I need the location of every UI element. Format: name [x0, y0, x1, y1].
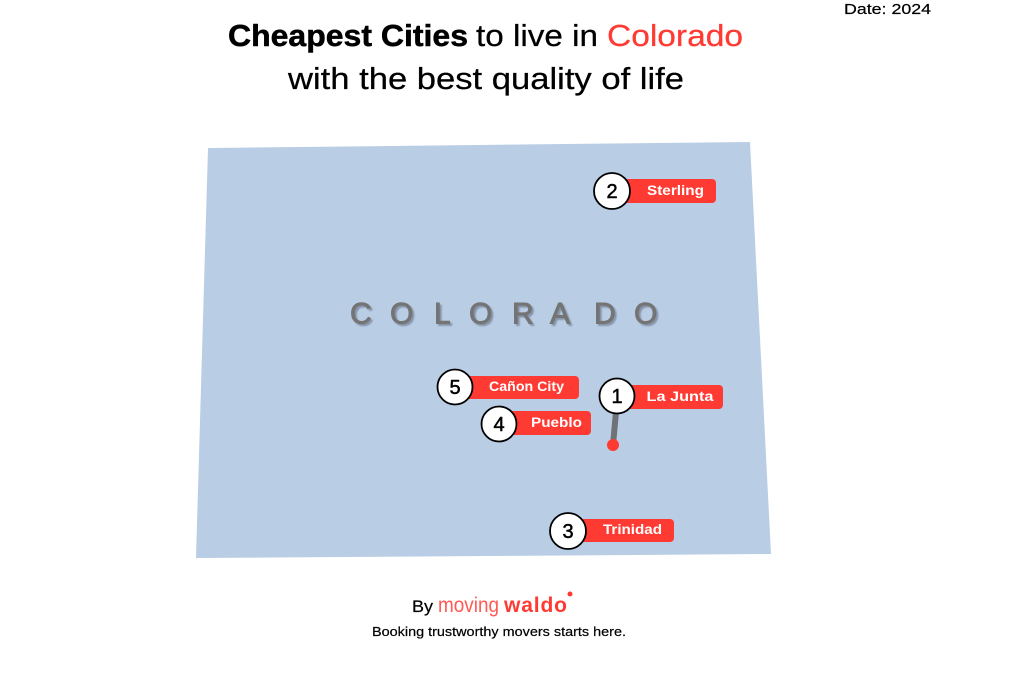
marker 2: Sterling: 2: [606, 181, 618, 203]
marker 1: La Junta with pin: La Junta: [646, 389, 714, 404]
footer: tagline: Booking trustworthy movers starts here.: [372, 624, 626, 639]
marker 5: Cañon City: Cañon City: [489, 379, 565, 394]
map label: COLORADO: COLORADO: [350, 298, 657, 330]
marker 4: Pueblo: [482, 406, 591, 442]
marker 4: Pueblo: 4: [493, 414, 505, 436]
footer: brand logo: waldo: [503, 594, 567, 617]
title: with the best quality of life: [287, 61, 684, 96]
title: Cheapest Cities: [228, 18, 468, 53]
marker 5: Cañon City: 5: [449, 377, 461, 399]
marker 1: La Junta with pin: [600, 378, 723, 451]
marker 2: Sterling: [594, 173, 716, 209]
title: Colorado: [607, 18, 743, 53]
marker 3: Trinidad: 3: [562, 521, 574, 543]
footer: brand logo: moving: [438, 594, 499, 617]
marker 2: Sterling: Sterling: [647, 183, 704, 198]
marker 1: La Junta with pin: 1: [611, 386, 623, 408]
date label: Date: 2024: [844, 1, 931, 18]
marker 4: Pueblo: Pueblo: [531, 415, 582, 430]
marker 3: Trinidad: [550, 513, 674, 549]
marker 3: Trinidad: Trinidad: [603, 522, 662, 537]
footer: brand logo: [412, 592, 572, 617]
map label: COLORADO: COLORADO: [352, 300, 659, 332]
footer: brand logo: By: [412, 597, 434, 616]
title: to live in: [476, 18, 598, 53]
marker 5: Cañon City: [438, 370, 579, 404]
title: [228, 18, 743, 96]
map: Colorado state: [196, 142, 771, 558]
